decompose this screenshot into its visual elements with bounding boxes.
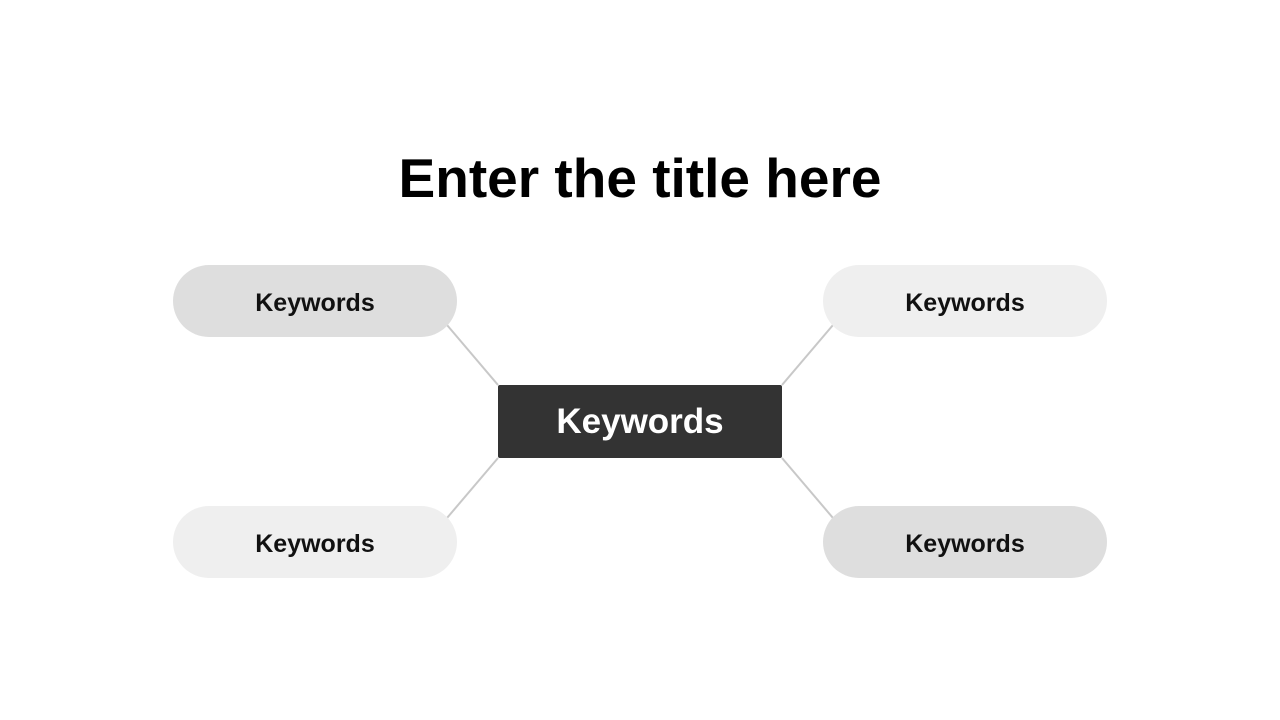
keyword top-left: Keywords [255,289,375,317]
center keyword: Keywords [556,402,724,441]
keyword top-right: Keywords [905,289,1025,317]
title: Enter the title here [399,147,881,209]
keyword top-right [823,265,1107,337]
keyword bottom-left: Keywords [255,530,375,558]
keyword bottom-right [823,506,1107,578]
keyword bottom-left [173,506,457,578]
keyword bottom-right: Keywords [905,530,1025,558]
center keyword [498,385,782,458]
keyword top-left [173,265,457,337]
